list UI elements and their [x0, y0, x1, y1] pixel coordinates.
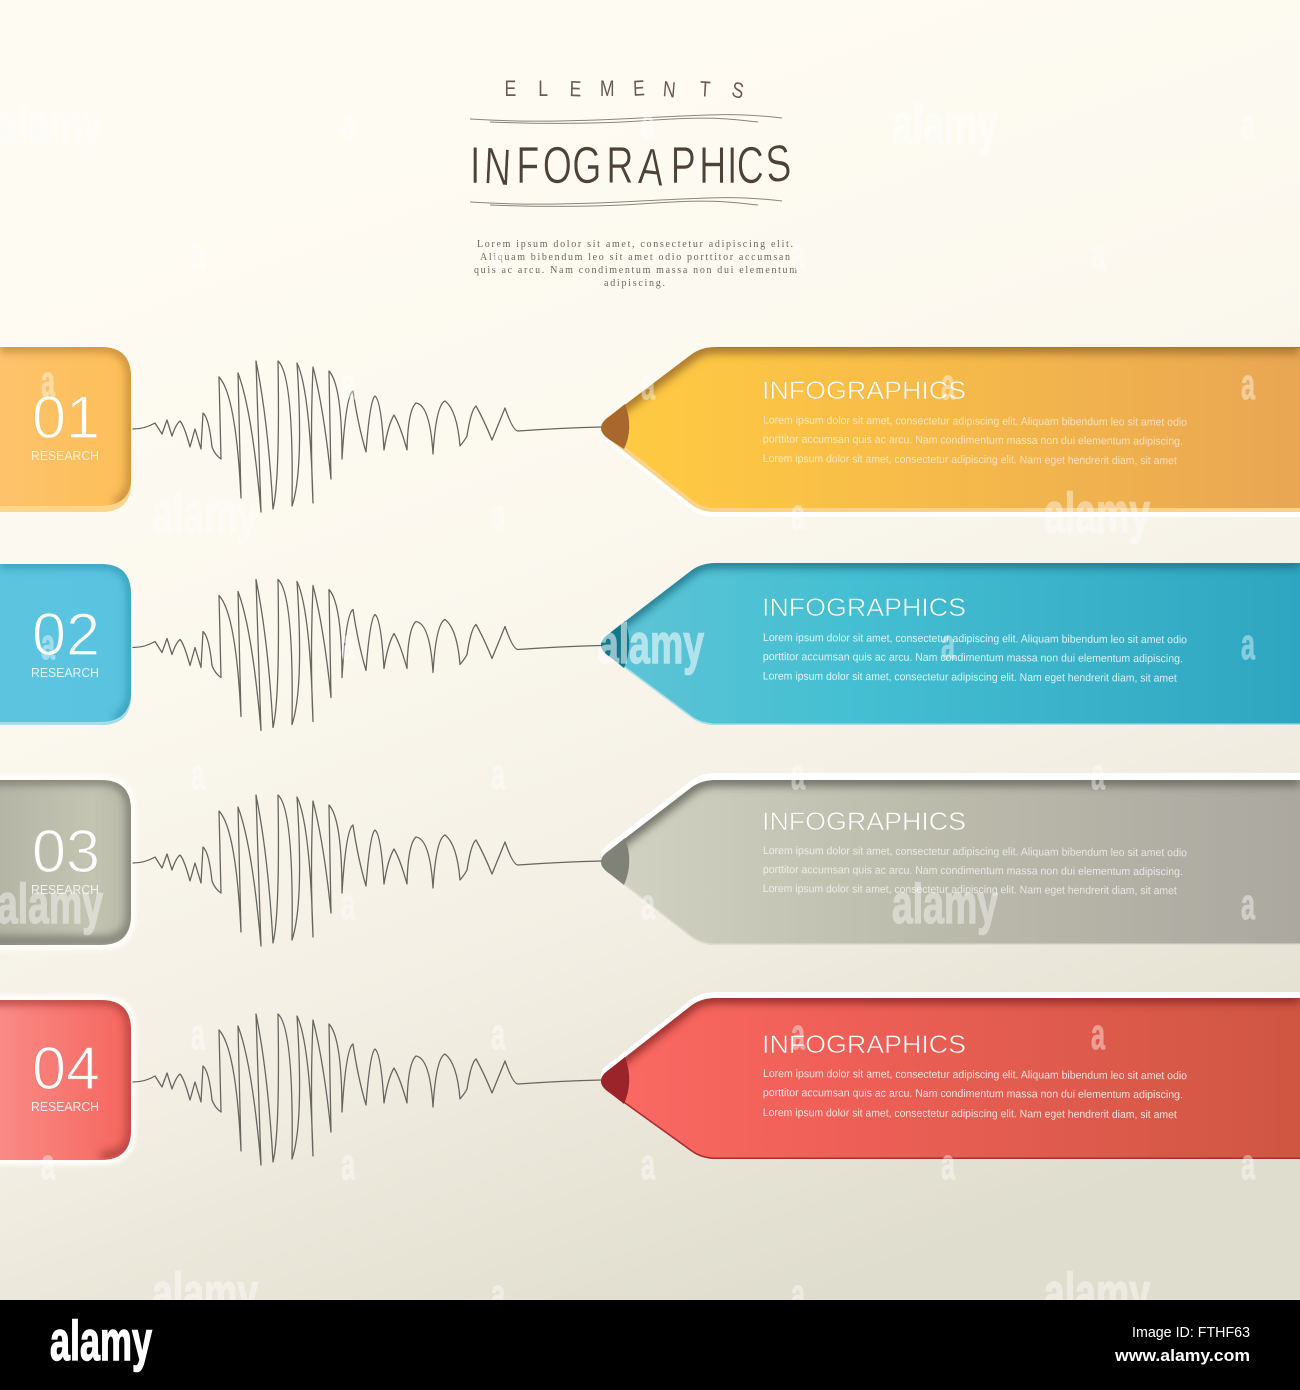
banner heading: INFOGRAPHICS: [762, 377, 966, 405]
watermarks: a: [341, 880, 355, 929]
watermarks: a: [341, 1140, 355, 1189]
watermarks: a: [1091, 1010, 1105, 1059]
banner text: [763, 845, 1187, 897]
label research: RESEARCH: [31, 882, 99, 897]
pencil banner: [601, 347, 1300, 517]
pencil lead: [601, 1057, 629, 1104]
pencil lead: [601, 404, 629, 449]
watermark on blue banner: alamy: [598, 612, 704, 675]
watermarks: a: [41, 357, 55, 406]
watermarks: alamy: [892, 872, 998, 935]
watermarks: a: [341, 100, 355, 149]
scribble line: [133, 580, 601, 730]
banner text: [763, 632, 1187, 685]
website: www.alamy.com: [1114, 1346, 1250, 1365]
watermarks: a: [1241, 620, 1255, 669]
watermarks: a: [791, 1010, 805, 1059]
watermarks: a: [191, 1010, 205, 1059]
watermarks: a: [791, 490, 805, 539]
watermarks: a: [491, 750, 505, 799]
watermarks: a: [41, 620, 55, 669]
label research: RESEARCH: [31, 665, 99, 680]
number 02: 02: [32, 601, 100, 668]
heading: infographics: INFOGRAPHICS: [470, 133, 793, 198]
label research: RESEARCH: [31, 448, 99, 463]
banner text: porttitor accumsan quis ac arcu. Nam condimentum massa non dui elementum adipiscing.: [763, 864, 1183, 878]
title block: [470, 76, 797, 289]
row 3: [0, 773, 1300, 946]
watermarks: alamy: [0, 872, 103, 935]
banner heading: INFOGRAPHICS: [762, 594, 966, 622]
banner text: [763, 415, 1187, 467]
watermarks: a: [641, 1140, 655, 1189]
divider strokes: lower: [470, 198, 782, 206]
watermarks: alamy: [1044, 481, 1150, 544]
footer logo: alamy: [50, 1309, 152, 1372]
row 1: [0, 347, 1300, 517]
watermarks: a: [191, 230, 205, 279]
pencil banner: [601, 992, 1300, 1159]
pencil lead: [601, 621, 629, 668]
intro paragraph: Aliquam bibendum leo sit amet odio porttitor accumsan: [480, 252, 790, 263]
banner heading: INFOGRAPHICS: [762, 1031, 966, 1059]
watermarks: a: [791, 750, 805, 799]
watermarks: a: [641, 100, 655, 149]
intro paragraph: adipiscing.: [604, 278, 665, 289]
watermarks: a: [1241, 880, 1255, 929]
tab 04: [0, 1000, 131, 1160]
watermarks: alamy: [892, 92, 998, 155]
label research: RESEARCH: [31, 1099, 99, 1114]
watermarks: alamy: [152, 1261, 258, 1324]
intro paragraph: Lorem ipsum dolor sit amet, consectetur adipiscing elit.: [477, 239, 793, 250]
row 4: [0, 992, 1300, 1165]
scribble line: [133, 1014, 601, 1165]
banner text: porttitor accumsan quis ac arcu. Nam condimentum massa non dui elementum adipiscing.: [763, 433, 1183, 448]
watermarks: a: [491, 1270, 505, 1319]
pencil banner: [601, 563, 1300, 725]
banner text: porttitor accumsan quis ac arcu. Nam condimentum massa non dui elementum adipiscing.: [763, 651, 1183, 665]
watermarks: alamy: [152, 482, 258, 545]
banner text: Lorem ipsum dolor sit amet, consectetur adipiscing elit. Nam eget hendrerit diam, sit amet: [763, 670, 1177, 685]
scribble line: [133, 795, 601, 946]
banner text: Lorem ipsum dolor sit amet, consectetur adipiscing elit. Aliquam bibendum leo sit amet odio: [763, 632, 1187, 646]
watermarks: a: [1241, 1140, 1255, 1189]
pencil lead: [601, 838, 629, 885]
banner heading: INFOGRAPHICS: [762, 808, 966, 836]
watermarks: alamy: [1044, 1261, 1150, 1324]
watermarks: a: [1091, 750, 1105, 799]
footer bar: [0, 1300, 1300, 1390]
banner text: Lorem ipsum dolor sit amet, consectetur adipiscing elit. Nam eget hendrerit diam, sit amet: [763, 883, 1177, 897]
image id: Image ID: FTHF63: [1132, 1324, 1250, 1341]
intro paragraph: [474, 239, 797, 289]
scribble line: [133, 361, 601, 512]
pencil banner: [601, 773, 1300, 945]
divider strokes: upper: [470, 115, 782, 123]
watermarks: a: [1241, 360, 1255, 409]
watermarks: a: [1091, 230, 1105, 279]
watermarks: a: [641, 880, 655, 929]
watermarks: a: [191, 750, 205, 799]
watermarks: a: [41, 1140, 55, 1189]
banner text: Lorem ipsum dolor sit amet, consectetur adipiscing elit. Aliquam bibendum leo sit amet odio: [763, 415, 1187, 429]
watermarks: a: [641, 360, 655, 409]
intro paragraph: quis ac arcu. Nam condimentum massa non dui elementum: [474, 265, 797, 276]
watermarks: a: [491, 490, 505, 539]
watermarks: a: [491, 230, 505, 279]
watermarks: a: [341, 620, 355, 669]
heading: elements: ELEMENTS: [505, 76, 746, 104]
banner text: [763, 1068, 1187, 1121]
watermarks: a: [1241, 100, 1255, 149]
tab 01: [0, 347, 131, 512]
number 04: 04: [32, 1035, 100, 1102]
watermarks: alamy: [0, 92, 103, 155]
banner text: Lorem ipsum dolor sit amet, consectetur adipiscing elit. Aliquam bibendum leo sit amet odio: [763, 1068, 1187, 1082]
tab 03: [0, 780, 131, 945]
banner text: Lorem ipsum dolor sit amet, consectetur adipiscing elit. Nam eget hendrerit diam, sit amet: [763, 453, 1177, 467]
banner text: Lorem ipsum dolor sit amet, consectetur adipiscing elit. Nam eget hendrerit diam, sit amet: [763, 1107, 1177, 1121]
number 03: 03: [32, 818, 100, 885]
row 2: [0, 563, 1300, 730]
number 01: 01: [32, 384, 100, 451]
watermarks: a: [491, 1010, 505, 1059]
watermarks: a: [341, 360, 355, 409]
watermarks: a: [941, 1140, 955, 1189]
watermarks: a: [941, 620, 955, 669]
watermarks: a: [791, 1270, 805, 1319]
tab 02: [0, 564, 131, 725]
watermarks: a: [941, 360, 955, 409]
banner text: Lorem ipsum dolor sit amet, consectetur adipiscing elit. Aliquam bibendum leo sit amet odio: [763, 845, 1187, 859]
watermarks: a: [791, 230, 805, 279]
banner text: porttitor accumsan quis ac arcu. Nam condimentum massa non dui elementum adipiscing.: [763, 1087, 1183, 1101]
